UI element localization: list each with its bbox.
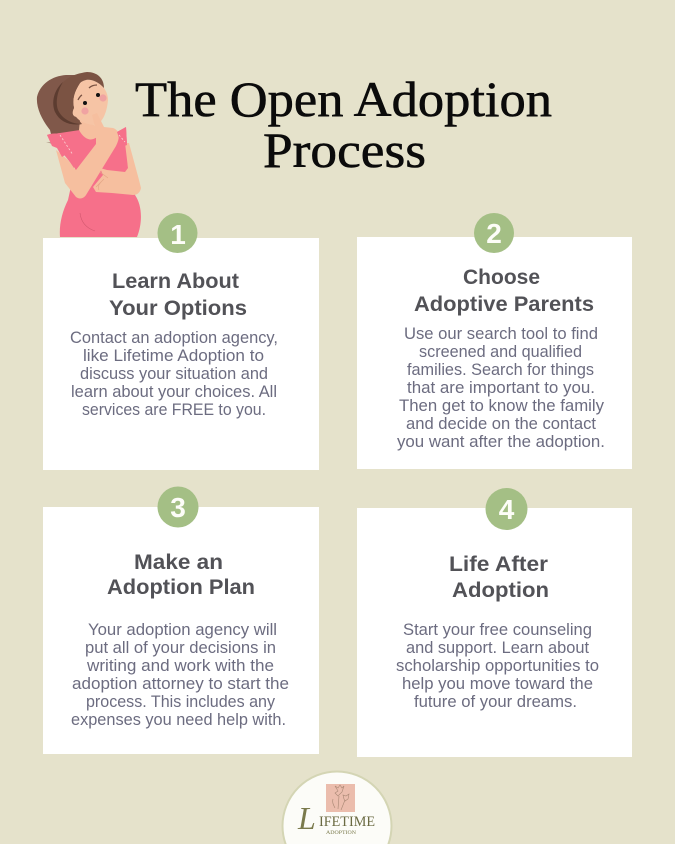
body text 2: [397, 325, 605, 451]
heading 4: Adoption: [452, 578, 549, 602]
body text 4: and support. Learn about: [406, 639, 589, 657]
heading 4: Life After: [449, 552, 549, 576]
body text 3: [71, 621, 289, 729]
heading 1: [109, 269, 247, 320]
panel: step 1: [43, 213, 319, 470]
heading 1: Your Options: [109, 296, 247, 320]
body text 3: put all of your decisions in: [85, 639, 276, 657]
body text 2: and decide on the contact: [406, 415, 596, 433]
number badge 2: [474, 213, 514, 253]
card 1 background: [43, 238, 319, 470]
body text 1: [70, 329, 278, 419]
heading 2: Choose: [463, 265, 540, 289]
logo: Lifetime Adoption: [282, 772, 392, 844]
body text 4: Start your free counseling: [403, 621, 592, 639]
heading 3: Make an: [134, 550, 223, 574]
number badge 2: 2: [486, 218, 502, 249]
body text 2: Then get to know the family: [399, 397, 605, 415]
body text 2: that are important to you.: [407, 379, 595, 397]
body text 3: process. This includes any: [86, 693, 276, 711]
body text 4: [396, 621, 599, 711]
title: Process: [263, 122, 426, 178]
number badge 4: 4: [499, 494, 515, 525]
body text 3: expenses you need help with.: [71, 711, 286, 729]
logo wordmark: IFETIME: [319, 814, 375, 830]
icon: tulips on pink square: [326, 784, 355, 812]
body text 3: Your adoption agency will: [88, 621, 277, 639]
body text 3: writing and work with the: [86, 657, 274, 675]
logo wordmark: ADOPTION: [326, 830, 356, 836]
heading 2: [414, 265, 594, 316]
illustration: pregnant woman thinking: [37, 72, 141, 237]
card 2 background: [357, 237, 632, 469]
body text 1: learn about your choices. All: [71, 383, 277, 401]
heading 3: [107, 550, 255, 599]
heading 1: Learn About: [112, 269, 239, 293]
logo wordmark: [297, 800, 375, 836]
body text 3: adoption attorney to start the: [72, 675, 289, 693]
body text 2: screened and qualified: [419, 343, 582, 361]
number badge 4: [486, 488, 528, 530]
body text 2: Use our search tool to find: [404, 325, 598, 343]
heading 2: Adoptive Parents: [414, 292, 594, 316]
title: [135, 71, 552, 178]
card 4 background: [357, 508, 632, 757]
body text 2: families. Search for things: [407, 361, 594, 379]
title: The Open Adoption: [135, 71, 552, 127]
panel: step 3: [43, 486, 319, 754]
body text 2: you want after the adoption.: [397, 433, 605, 451]
body text 1: Contact an adoption agency,: [70, 329, 278, 347]
body text 1: services are FREE to you.: [82, 401, 266, 419]
number badge 1: [158, 213, 198, 253]
body text 4: help you move toward the: [402, 675, 593, 693]
body text 4: scholarship opportunities to: [396, 657, 599, 675]
number badge 3: 3: [170, 492, 186, 523]
number badge 3: [158, 486, 198, 528]
card 3 background: [43, 507, 319, 754]
panel: step 2: [357, 213, 632, 469]
number badge 1: 1: [170, 219, 186, 250]
body text 4: future of your dreams.: [414, 693, 577, 711]
body text 1: discuss your situation and: [80, 365, 268, 383]
heading 4: [449, 552, 549, 602]
panel: step 4: [357, 488, 632, 757]
heading 3: Adoption Plan: [107, 575, 255, 599]
logo wordmark: L: [297, 800, 316, 836]
body text 1: like Lifetime Adoption to: [83, 347, 264, 365]
